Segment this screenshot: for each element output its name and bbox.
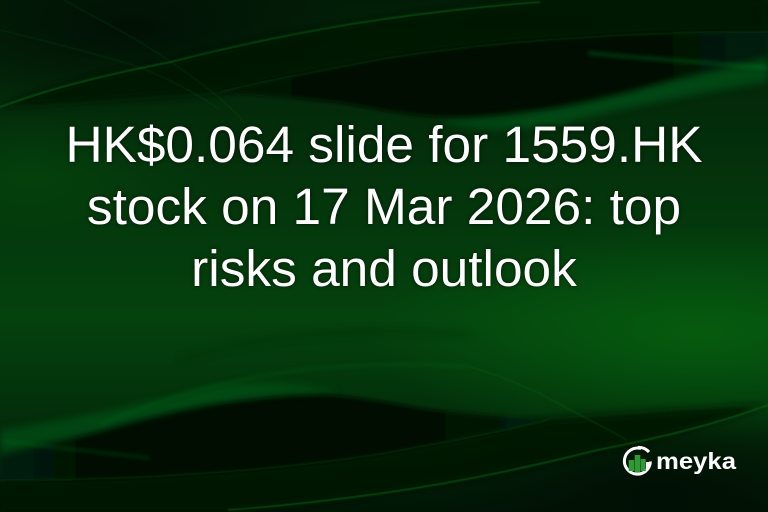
title	[65, 115, 703, 297]
wordmark: meyka	[656, 448, 736, 474]
title: risks and outlook	[191, 239, 577, 297]
icon: ring with bars	[624, 447, 650, 474]
title: stock on 17 Mar 2026: top	[87, 177, 681, 235]
logo: meyka	[622, 446, 736, 476]
title: HK$0.064 slide for 1559.HK	[65, 115, 703, 173]
